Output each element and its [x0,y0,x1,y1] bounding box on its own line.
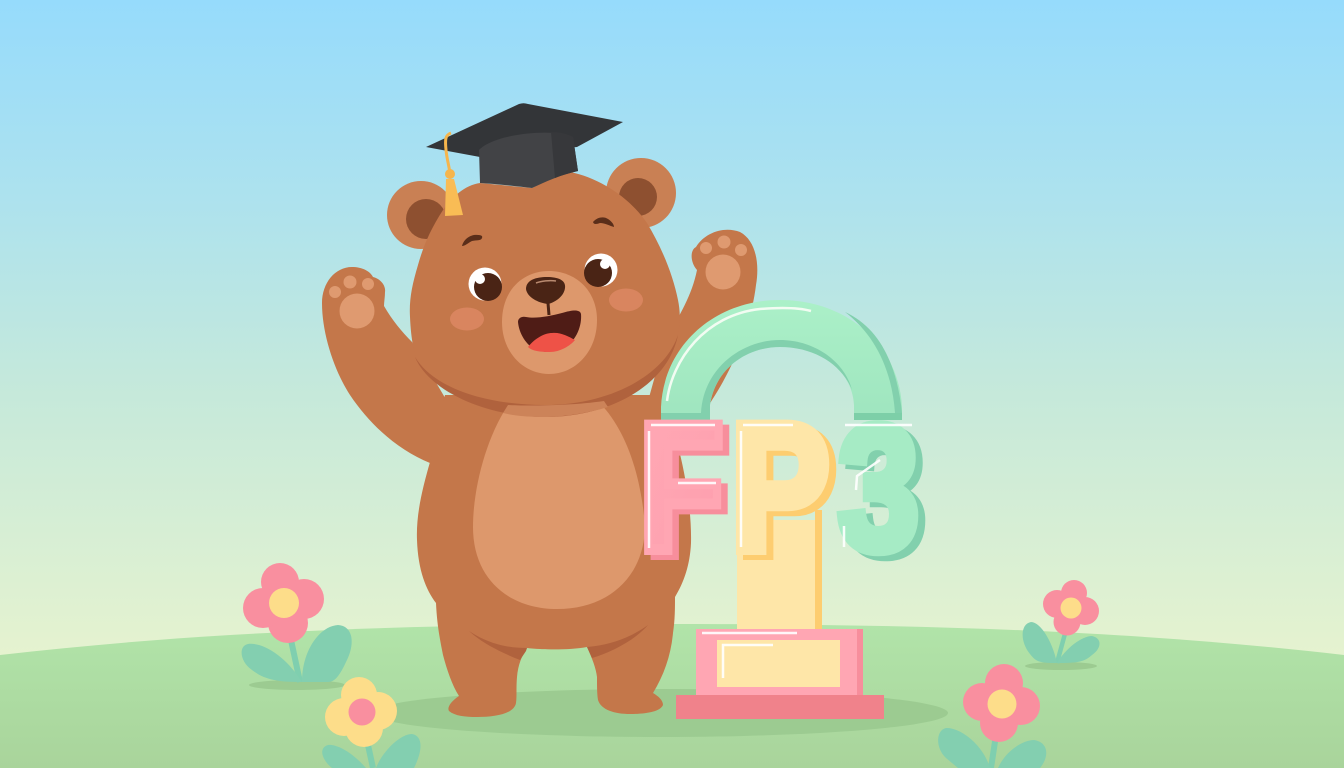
FP3 letters [639,387,926,594]
letter F: F [639,387,724,589]
chin shadow [415,335,678,417]
letter F: F [646,392,730,594]
letter 3: 3 [838,390,919,587]
left eye [468,268,502,301]
right blush [609,288,643,312]
arch [661,300,902,420]
bear left arm [322,267,470,463]
grassy hill [0,624,1344,768]
letter 3: 3 [845,395,926,592]
base plaque [717,640,840,687]
letter P: P [738,392,837,594]
left brow [462,235,482,246]
bear right arm [640,230,757,470]
bear right ear [606,158,676,228]
flower: right small [1023,580,1100,670]
ground shadow [372,689,948,737]
muzzle [502,271,597,374]
base plinth [676,695,884,719]
bear head [410,172,680,407]
bear left ear [387,181,455,249]
cap tassel [445,133,463,216]
flower: left pink [242,563,352,690]
graduation cap [426,103,623,216]
right eye [584,254,618,287]
belly overlap on chin [503,401,608,417]
mouth [518,310,581,352]
trophy base [676,629,884,719]
trophy post [737,510,822,630]
bear belly [473,403,645,609]
nose [526,277,565,315]
leg creases [469,625,648,660]
left blush [450,308,484,330]
right brow [593,217,614,227]
bear body and legs [417,395,691,717]
flower: front yellow [322,677,421,768]
letter P: P [730,387,830,589]
bear [322,103,757,717]
flower: right large [938,664,1046,768]
